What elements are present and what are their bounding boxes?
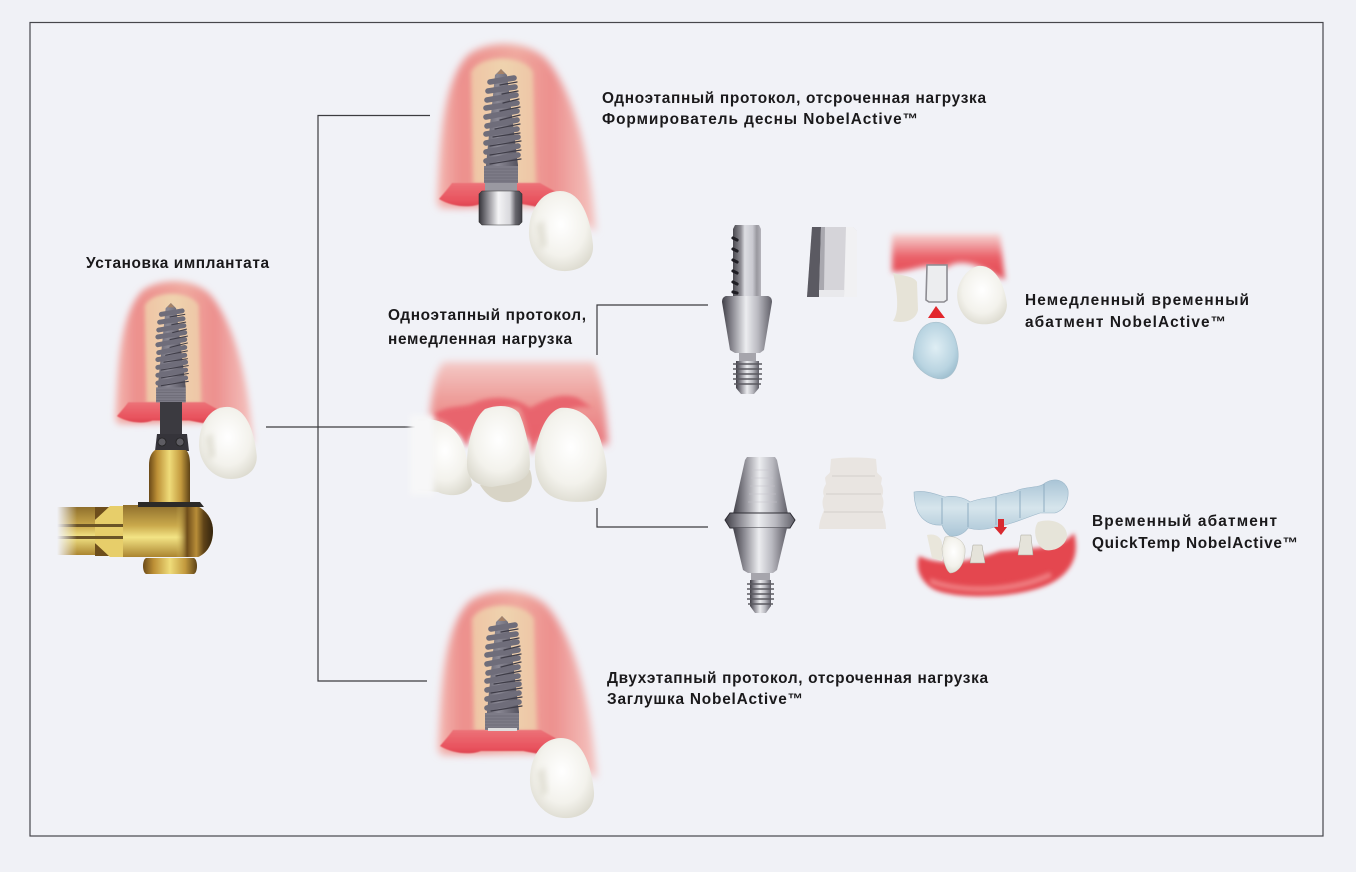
- front tooth: [942, 537, 965, 573]
- illustration: QuickTemp abutment: [725, 457, 795, 613]
- text: one-stage delayed loading: Одноэтапный протокол, отсроченная нагрузка: [602, 90, 986, 107]
- lower taper: [733, 528, 787, 573]
- implant screw: [484, 69, 521, 183]
- threaded post: [733, 225, 761, 298]
- text: QuickTemp temporary abutment: QuickTemp NobelActive™: [1092, 535, 1298, 552]
- implant post 2: [1018, 535, 1033, 555]
- gum and bone section: [115, 281, 254, 445]
- handpiece shaft: [57, 505, 95, 557]
- healing abutment neck: [485, 183, 517, 192]
- text: one-stage immediate loading: Одноэтапный протокол,: [388, 307, 586, 324]
- collar: [722, 296, 772, 353]
- handpiece connector: [95, 506, 124, 557]
- illustration: one-stage protocol, healing abutment: [437, 44, 596, 271]
- left tooth: [893, 273, 918, 322]
- text: immediate temporary abutment: Немедленный временный: [1025, 292, 1249, 309]
- cover screw: [488, 728, 517, 731]
- gum highlights: [930, 572, 1052, 592]
- cone ribs: [748, 470, 777, 502]
- text: two-stage delayed loading: [607, 670, 988, 708]
- gum: [892, 234, 1005, 280]
- driver collar: [155, 434, 189, 451]
- healing abutment: [479, 191, 522, 225]
- illustration: restored teeth, immediate loading: [410, 362, 608, 502]
- text: one-stage delayed loading: [602, 90, 986, 128]
- illustration: white plastic cap: [819, 458, 886, 529]
- text: QuickTemp temporary abutment: [1092, 513, 1298, 552]
- gum and bone section: [438, 591, 597, 779]
- connector lines: immediate loading branch: [597, 305, 708, 527]
- lower tooth shadow: [480, 470, 532, 502]
- abutment post: [926, 265, 947, 302]
- adjacent tooth: [199, 407, 257, 479]
- driver shaft: [160, 402, 182, 434]
- red arrow up: [928, 306, 945, 318]
- text: immediate temporary abutment: [1025, 292, 1249, 331]
- illustration: temporary abutment: [722, 225, 772, 394]
- right tooth: [535, 408, 607, 502]
- blue bridge: [914, 480, 1068, 536]
- implant post 1: [970, 545, 985, 563]
- connector lines: main tree: [266, 116, 430, 681]
- screw: [747, 580, 774, 613]
- front tooth small: [927, 534, 942, 561]
- red arrow down: [994, 519, 1007, 535]
- text: two-stage delayed loading: Заглушка NobelActive™: [607, 691, 803, 708]
- screw: [733, 361, 762, 394]
- handpiece head: [123, 502, 213, 557]
- illustration: two-stage protocol, cover screw: [438, 591, 597, 818]
- middle tooth: [467, 406, 530, 487]
- right tooth: [957, 266, 1007, 324]
- adjacent tooth: [530, 738, 594, 818]
- cone: [733, 457, 788, 514]
- implant screw: [156, 303, 188, 402]
- illustration: bridge on lower jaw: [914, 480, 1076, 596]
- left tooth: [418, 419, 472, 495]
- implant screw: [485, 616, 522, 730]
- illustration: crown placement on abutment: [892, 234, 1007, 379]
- neck: [751, 573, 770, 580]
- text: one-stage immediate loading: [388, 307, 586, 348]
- text: immediate temporary abutment: абатмент NobelActive™: [1025, 314, 1226, 331]
- gum: [430, 362, 608, 445]
- retention grooves: [733, 238, 737, 293]
- blue temporary crown: [913, 322, 958, 379]
- flange: [725, 513, 795, 528]
- text: two-stage delayed loading: Двухэтапный протокол, отсроченная нагрузка: [607, 670, 988, 687]
- adjacent tooth: [529, 191, 593, 271]
- heading: implant placement: Установка имплантата: [86, 255, 269, 272]
- handpiece button: [143, 558, 197, 574]
- illustration: temporary coping sleeve: [807, 227, 857, 297]
- gum and bone section: [437, 44, 596, 232]
- gold column: [149, 450, 190, 502]
- text: one-stage delayed loading: Формирователь десны NobelActive™: [602, 111, 918, 128]
- molar: [1035, 521, 1067, 550]
- illustration: implant placement with handpiece: [57, 281, 257, 574]
- text: one-stage immediate loading: немедленная нагрузка: [388, 331, 572, 348]
- gum arch: [918, 533, 1076, 596]
- text: QuickTemp temporary abutment: Временный абатмент: [1092, 513, 1277, 530]
- neck: [739, 353, 756, 361]
